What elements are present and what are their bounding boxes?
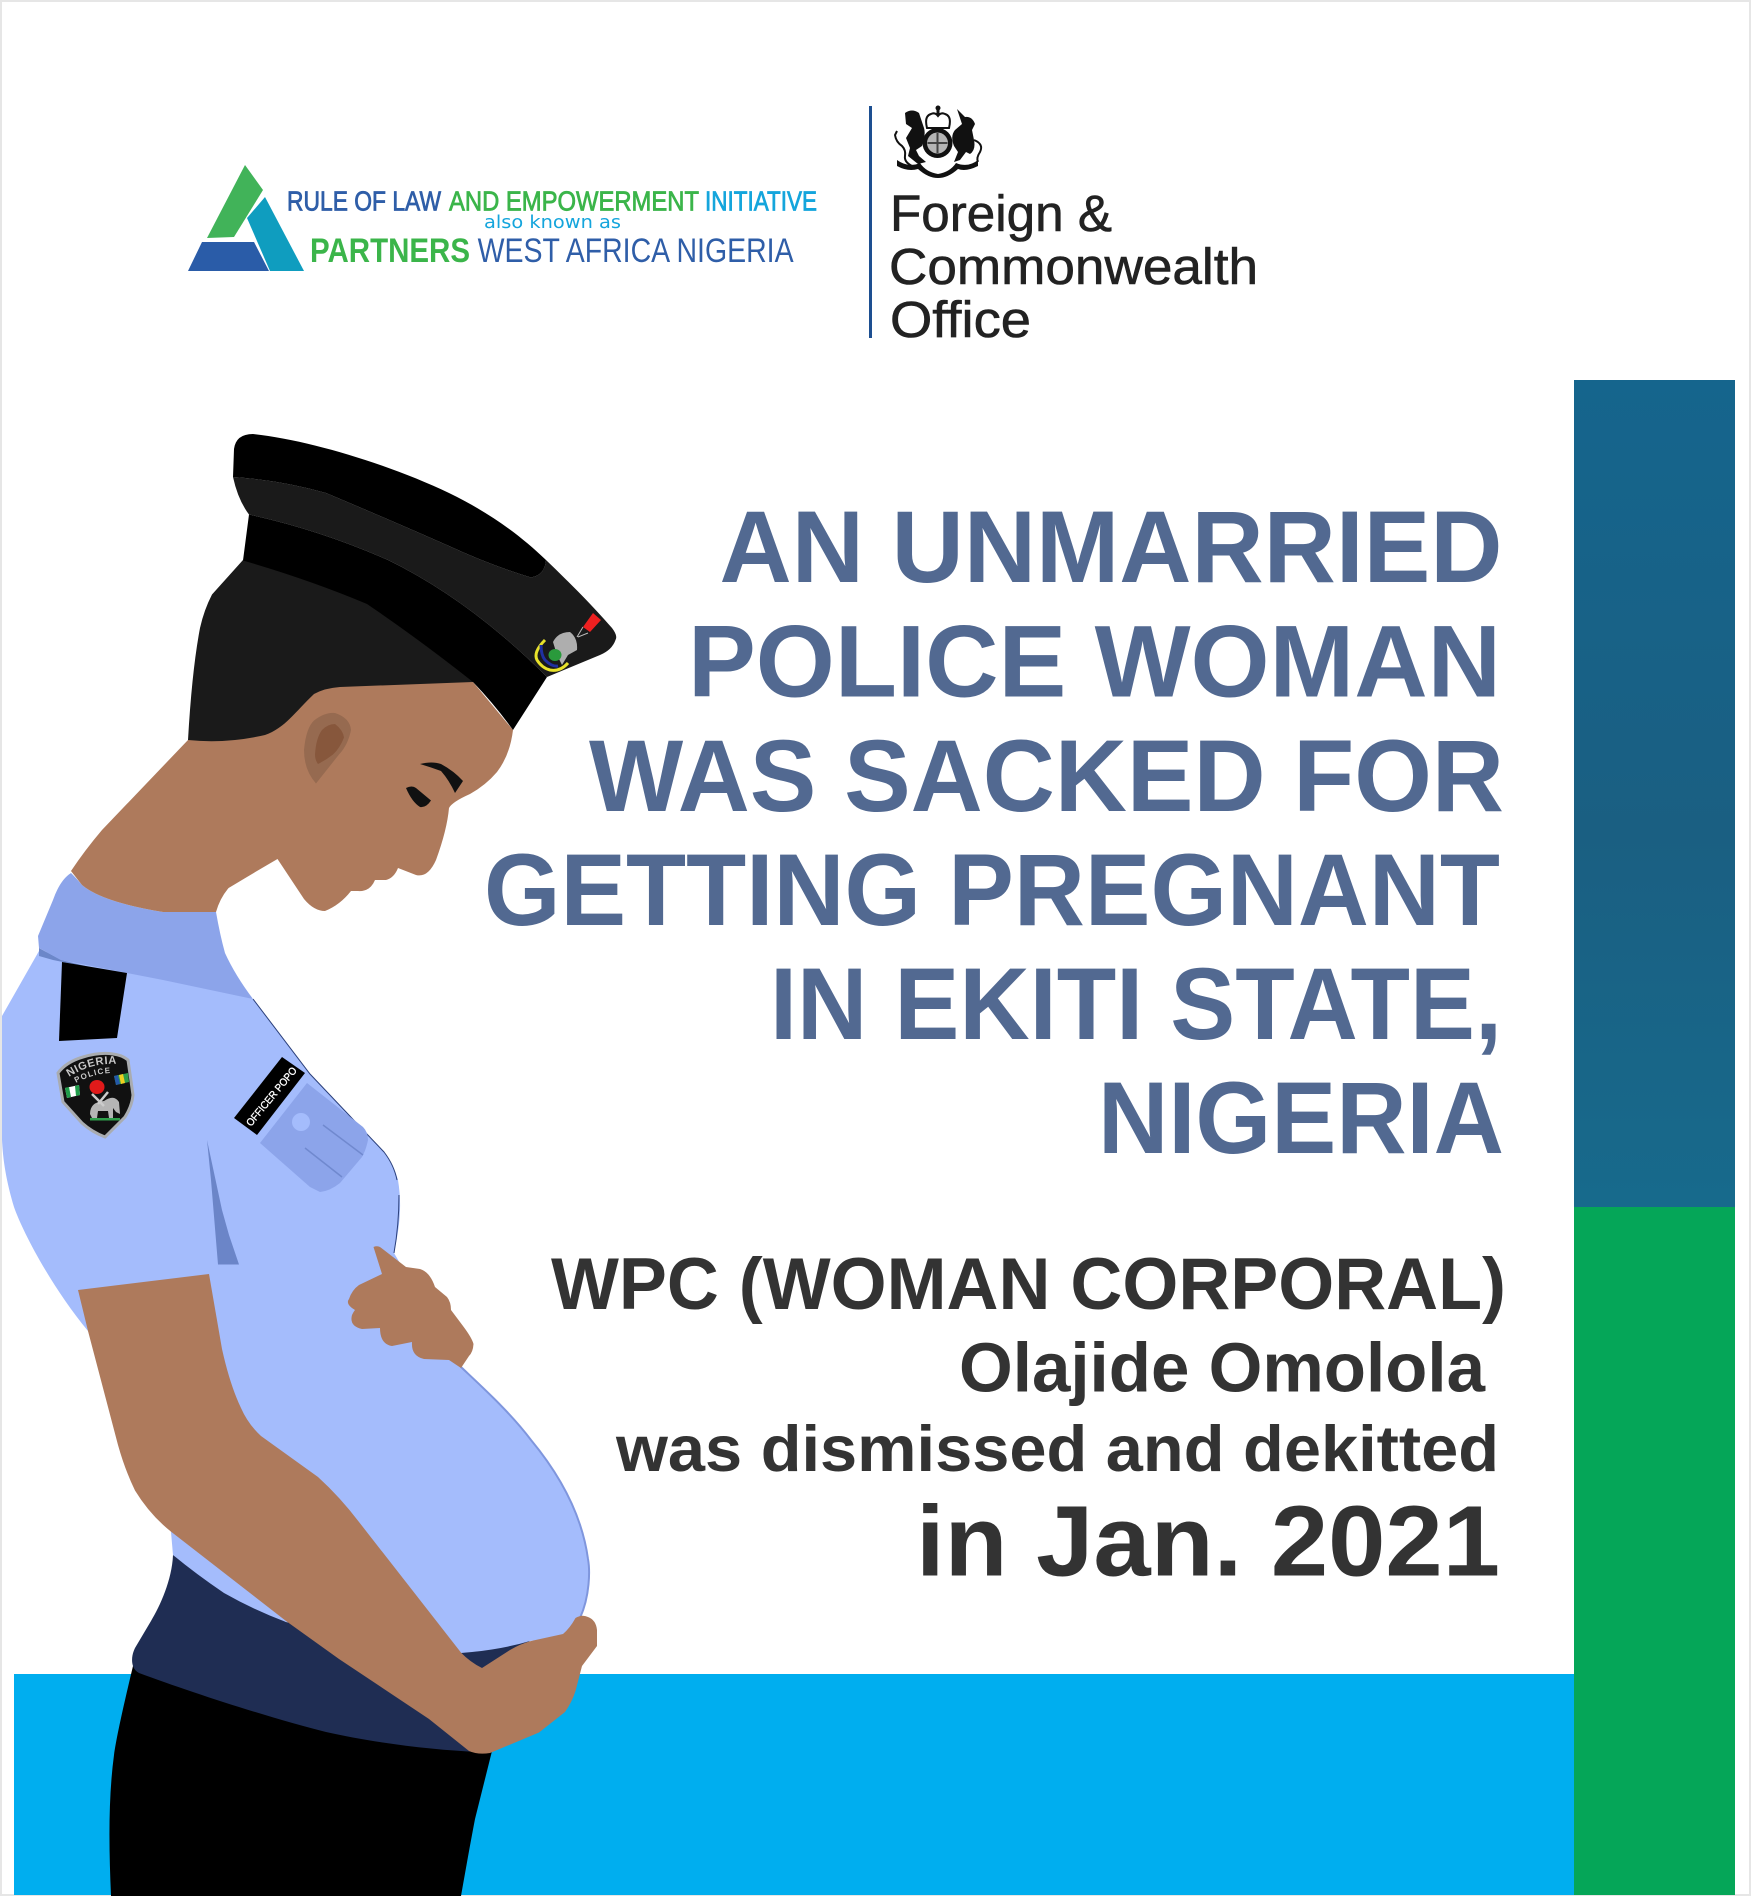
epaulette <box>59 962 127 1041</box>
logo text: foreign and commonwealth office <box>889 185 1258 348</box>
shirt pocket <box>260 1083 368 1192</box>
logo line: partners west africa nigeria: WEST AFRICA NIGERIA <box>478 232 794 270</box>
subheading text block: in Jan. 2021 <box>916 1486 1500 1598</box>
foreign and commonwealth office logo <box>869 106 1258 348</box>
arm <box>78 1274 597 1754</box>
icon: royal coat of arms crest <box>895 106 981 178</box>
headline: WAS SACKED FOR <box>589 719 1504 833</box>
collar <box>38 873 253 999</box>
neck and face <box>71 665 513 912</box>
logo line: rule of law and empowerment initiative <box>287 186 817 217</box>
subheading text block: was dismissed and dekitted <box>615 1412 1499 1485</box>
logo mark: triangle <box>188 165 304 271</box>
cap top <box>233 434 546 578</box>
cap badge <box>536 613 601 670</box>
shirt outline <box>253 999 399 1253</box>
subheading text block: Olajide Omolola <box>959 1328 1486 1406</box>
illustration: pregnant police woman <box>2 434 616 1896</box>
belly outline <box>461 1367 589 1618</box>
ear <box>304 713 351 784</box>
uniform shirt <box>2 951 589 1653</box>
light blue floor band <box>14 1674 1574 1895</box>
logo line: partners west africa nigeria <box>310 232 794 270</box>
arm badge: nigeria police: NIGERIA <box>66 1056 116 1076</box>
upper hand on belly <box>348 1246 474 1368</box>
belt and waist <box>132 1555 530 1752</box>
collar shadow <box>39 948 102 970</box>
shield <box>922 128 952 158</box>
sleeve crease <box>207 1140 239 1264</box>
teal vertical bar <box>1574 380 1735 1207</box>
arm badge: nigeria police: POLICE <box>74 1068 110 1083</box>
green vertical bar <box>1574 1207 1735 1895</box>
headline <box>484 490 1504 1175</box>
lion <box>905 110 926 164</box>
headline: NIGERIA <box>1098 1061 1504 1175</box>
logo line: rule of law and empowerment initiative: INITIATIVE <box>705 186 817 217</box>
motto ribbon <box>897 160 978 178</box>
subheading text block: WPC (WOMAN CORPORAL) <box>551 1244 1506 1325</box>
headline: IN EKITI STATE, <box>770 947 1502 1061</box>
hair <box>188 545 500 741</box>
closed eye <box>406 786 431 807</box>
logo text: foreign and commonwealth office: Office <box>890 291 1031 348</box>
logo line: partners west africa nigeria: PARTNERS <box>310 232 470 270</box>
name tag: OFFICER POPO <box>244 1065 300 1129</box>
headline: AN UNMARRIED <box>720 490 1502 604</box>
police cap <box>233 434 616 730</box>
crown <box>926 113 950 128</box>
cap band <box>243 514 547 730</box>
logo line: also known as: also known as <box>484 212 621 233</box>
partners west africa logo <box>188 165 817 271</box>
arm badge: nigeria police <box>56 1052 134 1139</box>
logo line: rule of law and empowerment initiative: AND EMPOWERMENT <box>449 186 699 217</box>
unicorn <box>952 109 975 162</box>
cap crown dark panel <box>233 477 616 677</box>
headline: GETTING PREGNANT <box>484 833 1500 947</box>
trousers <box>109 1666 492 1896</box>
headline: POLICE WOMAN <box>688 604 1501 718</box>
eyebrow <box>420 762 463 793</box>
logo text: foreign and commonwealth office: Commonwealth <box>889 238 1258 295</box>
logo text: foreign and commonwealth office: Foreign & <box>890 185 1112 242</box>
logo line: rule of law and empowerment initiative: RULE OF LAW <box>287 186 441 217</box>
subheading text block <box>551 1244 1506 1598</box>
